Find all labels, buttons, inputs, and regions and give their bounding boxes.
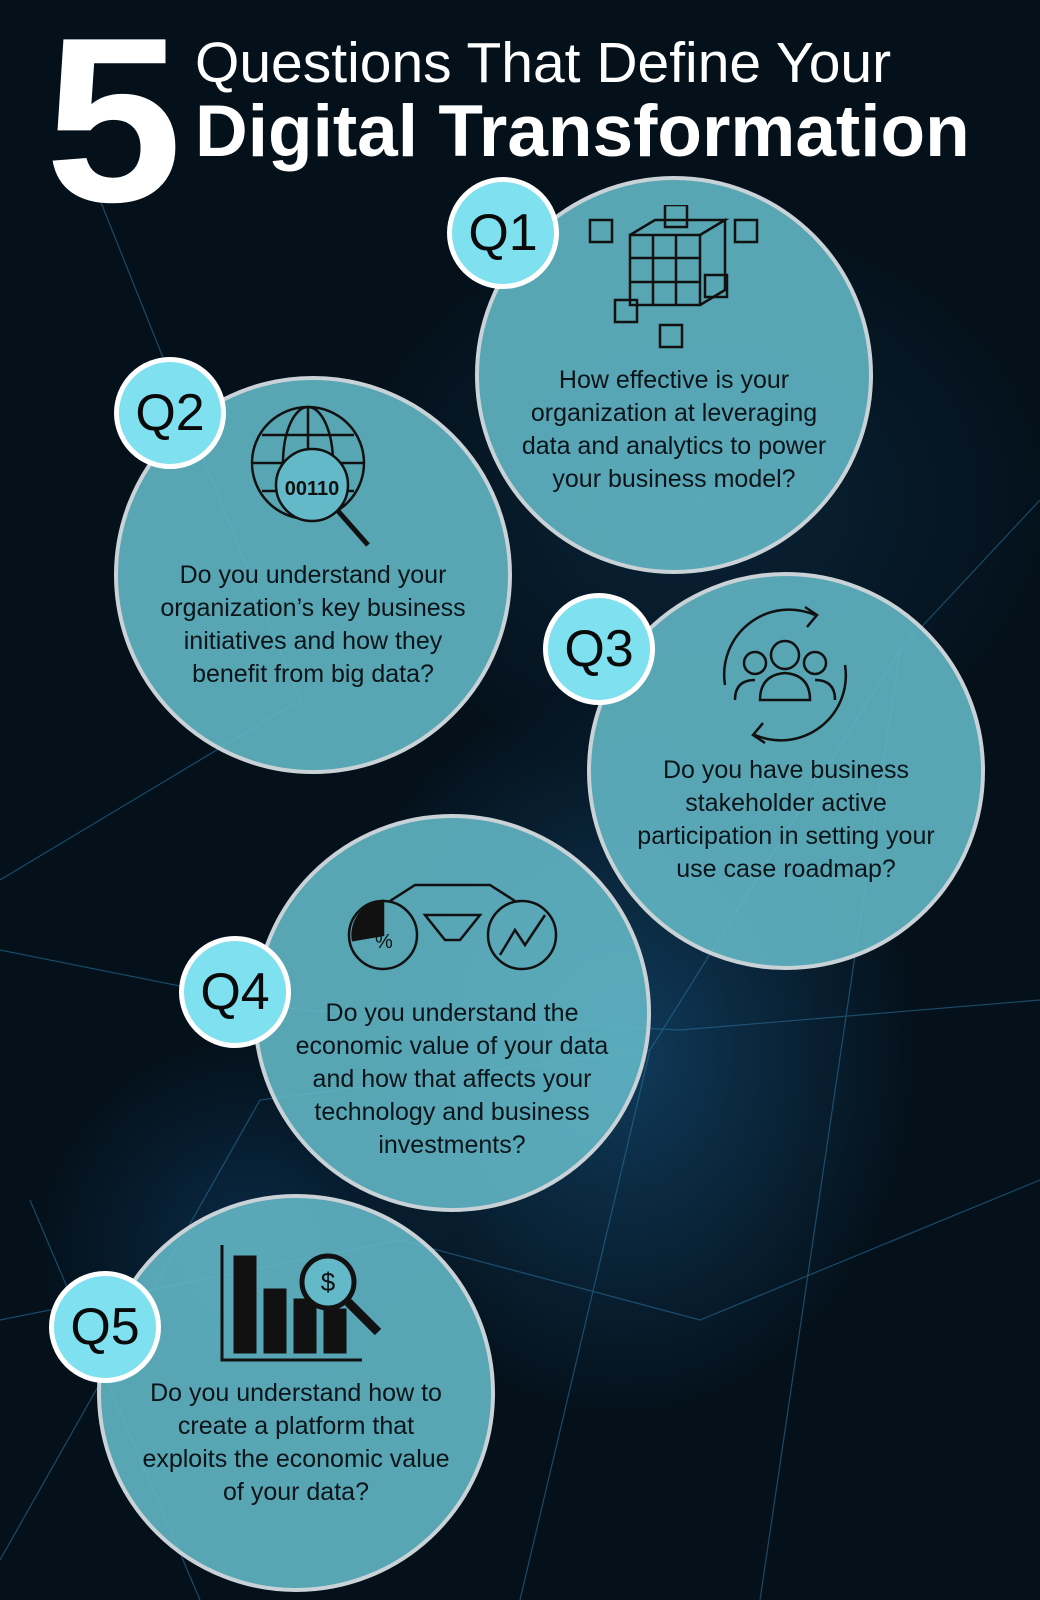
text: Q2: [160, 561, 466, 688]
panel: Q1: [475, 176, 873, 574]
panel: Q3: [587, 572, 985, 970]
text: Q3: Do you have business: [663, 756, 909, 784]
badge: Q1: [447, 177, 559, 289]
text: Q4: economic value of your data: [296, 1032, 608, 1060]
title line 2: Digital Transformation: [195, 91, 970, 172]
panel: Q2: [114, 376, 512, 774]
icon: binoculars: %: [375, 931, 393, 953]
text: Q2: benefit from big data?: [192, 660, 434, 688]
icon: people cycle: [722, 606, 848, 744]
text: Q2: organization’s key business: [160, 594, 466, 622]
text: Q3: stakeholder active: [685, 789, 887, 817]
badge: Q5: [49, 1271, 161, 1383]
icon: bar chart magnifier: $: [321, 1267, 336, 1297]
badge: Q2: Q2: [135, 384, 205, 442]
badge: Q2: [114, 357, 226, 469]
text: Q3: participation in setting your: [637, 822, 935, 850]
icon: globe: [250, 406, 370, 547]
icon: cubes: [588, 205, 758, 348]
text: Q3: [637, 756, 935, 883]
badge: Q4: [179, 936, 291, 1048]
text: Q1: data and analytics to power: [522, 432, 826, 460]
text: Q5: create a platform that: [178, 1412, 414, 1440]
badge: Q4: Q4: [200, 963, 270, 1021]
icon: globe: 00110: [285, 478, 339, 500]
badge: Q5: Q5: [70, 1298, 140, 1356]
panel: Q5: [97, 1194, 495, 1592]
text: Q2: Do you understand your: [180, 561, 446, 589]
panel: Q4: [253, 814, 651, 1212]
text: Q4: [296, 999, 608, 1159]
badge: Q3: Q3: [564, 620, 634, 678]
title: [45, 0, 970, 251]
text: Q2: initiatives and how they: [184, 627, 442, 655]
text: Q5: exploits the economic value: [142, 1445, 450, 1473]
text: Q1: How effective is your: [559, 366, 789, 394]
text: Q1: your business model?: [552, 465, 796, 493]
text: Q4: investments?: [378, 1131, 526, 1159]
text: Q4: technology and business: [314, 1098, 590, 1126]
text: Q1: organization at leveraging: [531, 399, 817, 427]
text: Q4: Do you understand the: [326, 999, 578, 1027]
badge: Q1: Q1: [468, 204, 538, 262]
text: Q5: Do you understand how to: [150, 1379, 442, 1407]
text: Q5: of your data?: [223, 1478, 369, 1506]
text: Q1: [522, 366, 826, 493]
icon: bar chart magnifier: [220, 1245, 382, 1362]
text: Q4: and how that affects your: [313, 1065, 591, 1093]
icon: binoculars: [348, 884, 558, 970]
text: Q3: use case roadmap?: [676, 855, 896, 883]
text: Q5: [142, 1379, 450, 1506]
title line 1: Questions That Define Your: [195, 31, 891, 95]
badge: Q3: [543, 593, 655, 705]
